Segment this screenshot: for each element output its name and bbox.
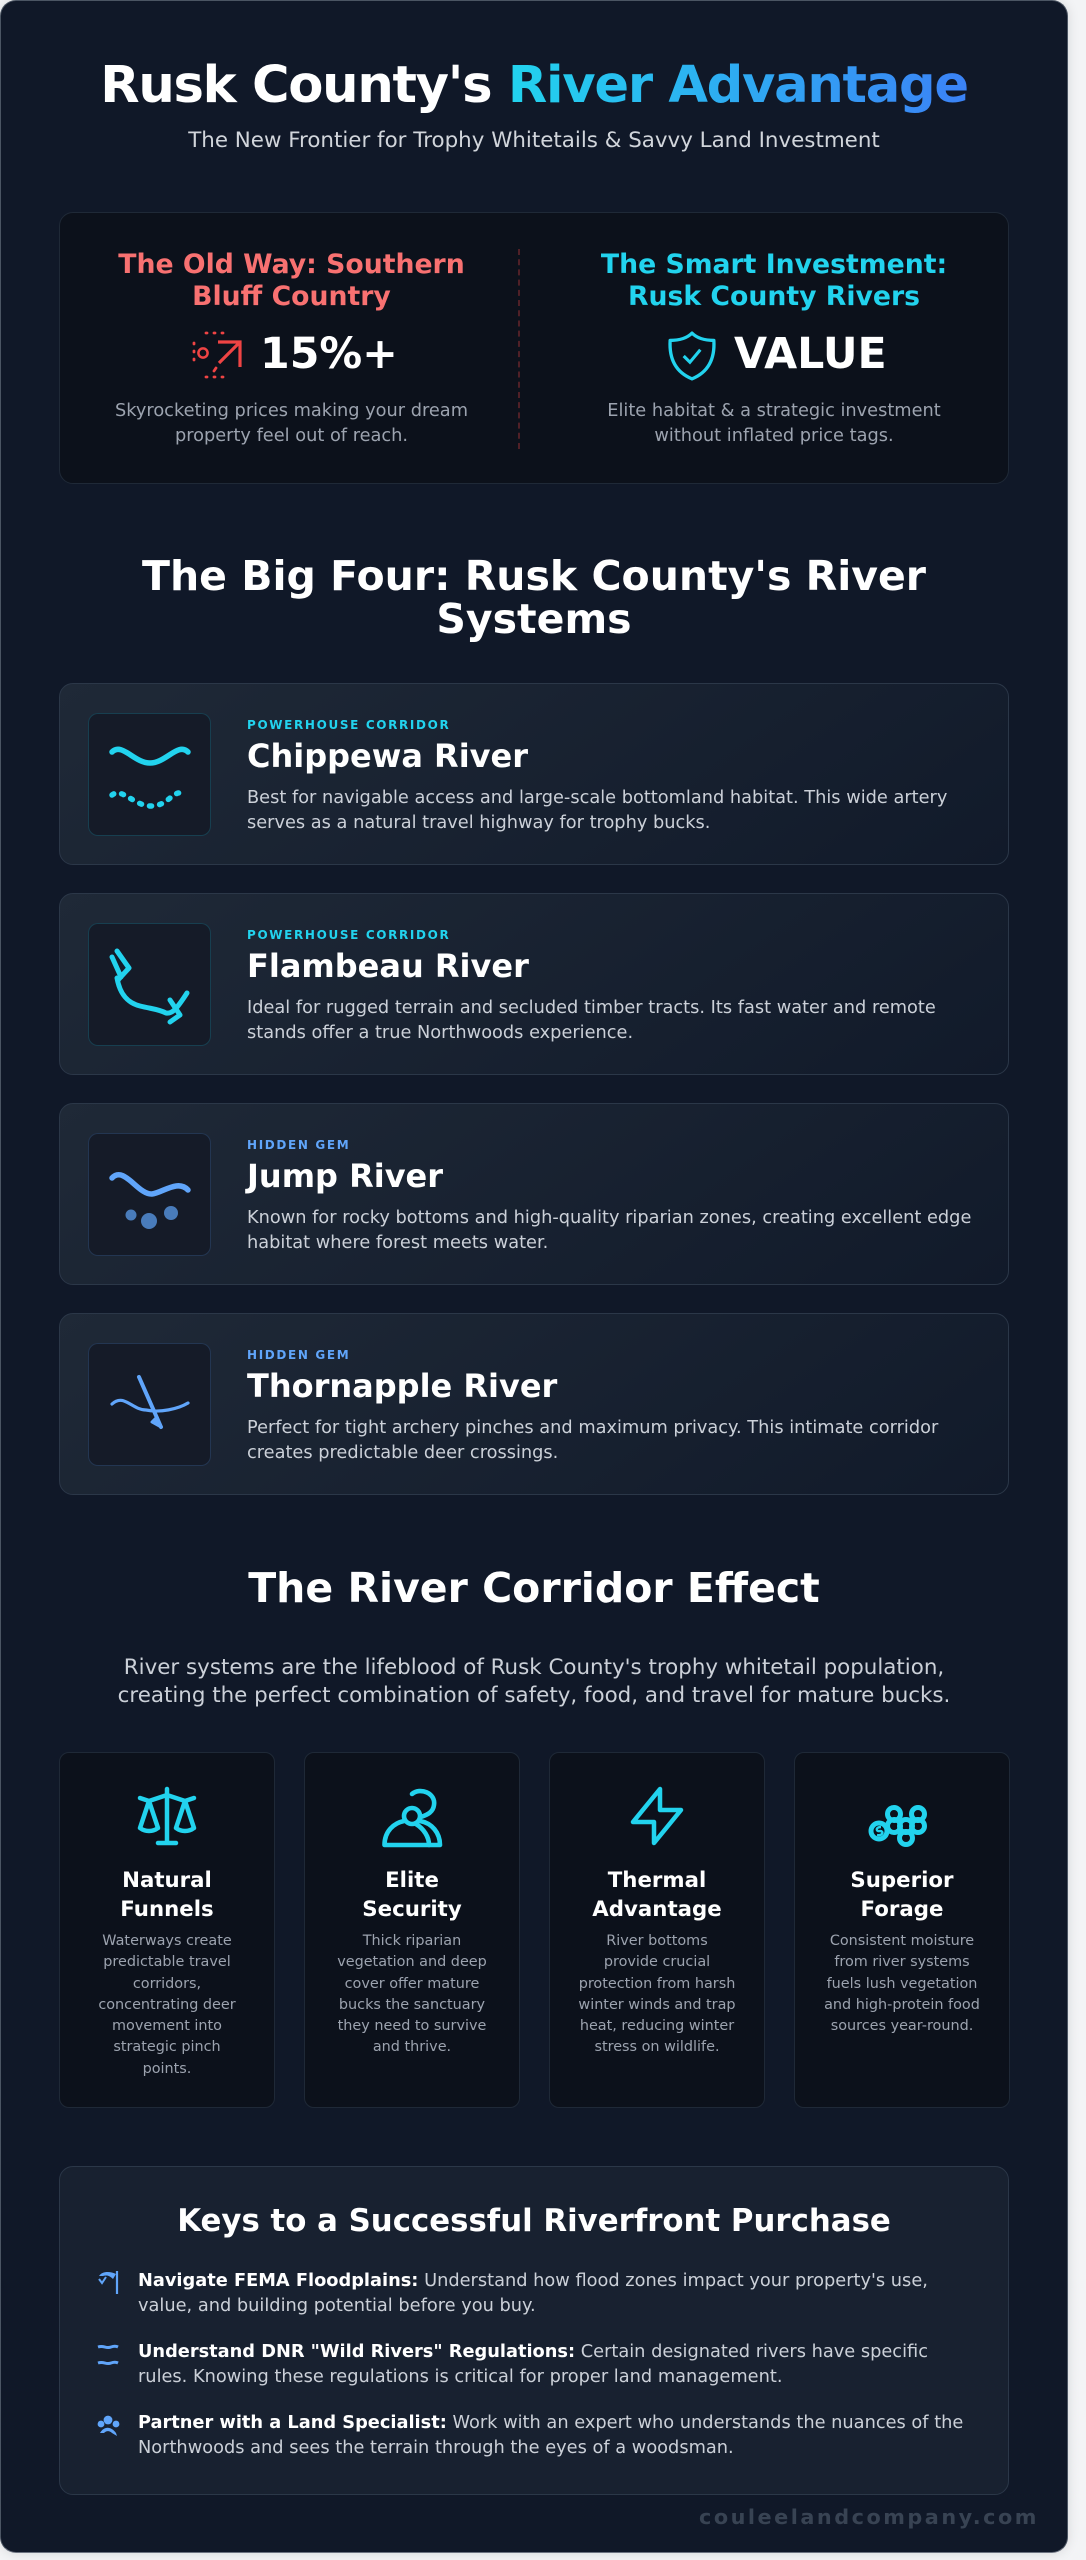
icon: jump (88, 1133, 211, 1256)
card text (337, 1933, 487, 2055)
description: Known for rocky bottoms and high-quality riparian zones, creating excellent edge (247, 1208, 971, 1228)
stat value: VALUE (734, 329, 887, 379)
card: thermal advantage (549, 1752, 765, 2108)
river name: Chippewa River (247, 736, 528, 774)
divider (518, 249, 520, 449)
card: chippewa river (59, 683, 1009, 865)
description (247, 998, 936, 1043)
heading: big four: The Big Four: Rusk County's River (142, 552, 926, 600)
heading: river corridor effect: The River Corridor Effect (248, 1564, 820, 1612)
intro paragraph: creating the perfect combination of safety, food, and travel for mature bucks. (118, 1683, 950, 1708)
key item 3: Northwoods and sees the terrain through the eyes of a woodsman. (138, 2436, 734, 2458)
card text: cover offer mature (345, 1976, 479, 1992)
tag: HIDDEN GEM (247, 1348, 350, 1362)
icon: thornapple (88, 1343, 211, 1466)
river name: Jump River (247, 1156, 443, 1194)
card text (98, 1933, 236, 2077)
old way description: Skyrocketing prices making your dream (115, 401, 468, 421)
card text: from river systems (834, 1954, 970, 1970)
card: elite security (304, 1752, 520, 2108)
card text: Thick riparian (363, 1933, 461, 1949)
card text: movement into (112, 2018, 222, 2034)
icon: scale (138, 1786, 196, 1846)
smart investment description (607, 401, 941, 446)
key item 1: value, and building potential before you buy. (138, 2294, 536, 2316)
heading: keys: Keys to a Successful Riverfront Purchase (177, 2203, 891, 2239)
card title (120, 1868, 214, 1922)
card text: sources year-round. (831, 2018, 973, 2034)
icon: wild river waves (98, 2344, 119, 2365)
card: thornapple river (59, 1313, 1009, 1495)
smart investment description: Elite habitat & a strategic investment (607, 401, 941, 421)
card text: bucks the sanctuary (339, 1997, 485, 2013)
card text: points. (143, 2061, 191, 2077)
card title: Superior (850, 1868, 954, 1893)
watermark: couleelandcompany.com (699, 2505, 1039, 2529)
key item 2 (138, 2340, 928, 2386)
stat 15%: 15%+ (260, 329, 398, 379)
card text: vegetation and deep (337, 1954, 487, 1970)
card title: Security (362, 1897, 462, 1922)
old way heading: The Old Way: Southern (118, 249, 465, 280)
card text: predictable travel (103, 1954, 231, 1970)
card: superior forage (794, 1752, 1010, 2108)
card text: and thrive. (373, 2039, 451, 2055)
card title: Thermal (608, 1868, 706, 1893)
heading: big four (142, 552, 926, 643)
key item 1: Navigate FEMA Floodplains: Understand how flood zones impact your property's use, (138, 2270, 928, 2290)
description: Ideal for rugged terrain and secluded timber tracts. Its fast water and remote (247, 998, 936, 1018)
icon: chippewa (88, 713, 211, 836)
tag: HIDDEN GEM (247, 1138, 350, 1152)
description: serves as a natural travel highway for trophy bucks. (247, 813, 710, 833)
river name: Thornapple River (247, 1366, 557, 1404)
intro paragraph: River systems are the lifeblood of Rusk County's trophy whitetail population, (124, 1655, 944, 1680)
card text: concentrating deer (98, 1997, 236, 2013)
key item 2: rules. Knowing these regulations is critical for proper land management. (138, 2366, 782, 2386)
description: creates predictable deer crossings. (247, 1443, 558, 1463)
card text: fuels lush vegetation (827, 1976, 977, 1992)
old way heading: Bluff Country (192, 281, 391, 312)
old way description: property feel out of reach. (175, 426, 408, 446)
card text: they need to survive (338, 2018, 486, 2034)
card title: Funnels (120, 1897, 214, 1922)
card text (578, 1933, 736, 2055)
subtitle: The New Frontier for Trophy Whitetails & Savvy Land Investment (188, 128, 880, 153)
smart investment description: without inflated price tags. (654, 426, 894, 446)
icon: bolt (630, 1786, 684, 1846)
description: habitat where forest meets water. (247, 1233, 548, 1253)
smart investment heading: The Smart Investment: (601, 249, 947, 280)
card title: Elite (385, 1868, 439, 1893)
old way heading (118, 249, 465, 312)
icon: flambeau (88, 923, 211, 1046)
card title (592, 1868, 722, 1922)
heading: big four: Systems (436, 595, 632, 643)
icon: land specialist (98, 2416, 120, 2436)
key item 3: Partner with a Land Specialist: Work with an expert who understands the nuances of the (138, 2412, 963, 2432)
card title: Forage (861, 1897, 943, 1922)
smart investment heading: Rusk County Rivers (628, 281, 920, 312)
icon: people / hook (382, 1788, 442, 1848)
panel: old way vs smart investment (59, 212, 1009, 484)
panel: keys to purchase (59, 2166, 1009, 2495)
smart investment heading (601, 249, 947, 312)
key item 3 (138, 2412, 963, 2458)
icon: floodplain flag (98, 2271, 118, 2294)
icon: forage cluster (868, 1805, 927, 1847)
description: stands offer a true Northwoods experience. (247, 1023, 633, 1043)
card text: stress on wildlife. (594, 2039, 720, 2055)
icon: red rising arrow (192, 332, 242, 378)
card text: strategic pinch (113, 2039, 221, 2055)
card title (362, 1868, 462, 1922)
card text: and high-protein food (824, 1997, 980, 2013)
description: Best for navigable access and large-scale bottomland habitat. This wide artery (247, 788, 947, 808)
tag: POWERHOUSE CORRIDOR (247, 718, 450, 732)
card text: protection from harsh (579, 1976, 735, 1992)
card: jump river (59, 1103, 1009, 1285)
card: natural funnels (59, 1752, 275, 2108)
river name: Flambeau River (247, 946, 529, 984)
card title (850, 1868, 954, 1922)
intro paragraph (118, 1655, 950, 1708)
description: Perfect for tight archery pinches and maximum privacy. This intimate corridor (247, 1418, 938, 1438)
description (247, 788, 947, 833)
description (247, 1208, 971, 1253)
card: flambeau river (59, 893, 1009, 1075)
card title: Advantage (592, 1897, 722, 1922)
card text (824, 1933, 980, 2034)
key item 1 (138, 2270, 928, 2316)
old way description (115, 401, 468, 446)
title: Rusk County's River Advantage (100, 55, 968, 115)
card text: winter winds and trap (578, 1997, 736, 2013)
description (247, 1418, 938, 1463)
tag: POWERHOUSE CORRIDOR (247, 928, 450, 942)
key item 2: Understand DNR "Wild Rivers" Regulations: Certain designated rivers have specific (138, 2340, 928, 2362)
icon: shield check (668, 331, 716, 380)
card text: Waterways create (102, 1933, 232, 1949)
card text: heat, reducing winter (580, 2018, 734, 2034)
card title: Natural (122, 1868, 212, 1893)
card text: provide crucial (604, 1954, 710, 1970)
card text: corridors, (133, 1976, 201, 1992)
card text: River bottoms (606, 1933, 708, 1949)
card text: Consistent moisture (830, 1933, 974, 1949)
